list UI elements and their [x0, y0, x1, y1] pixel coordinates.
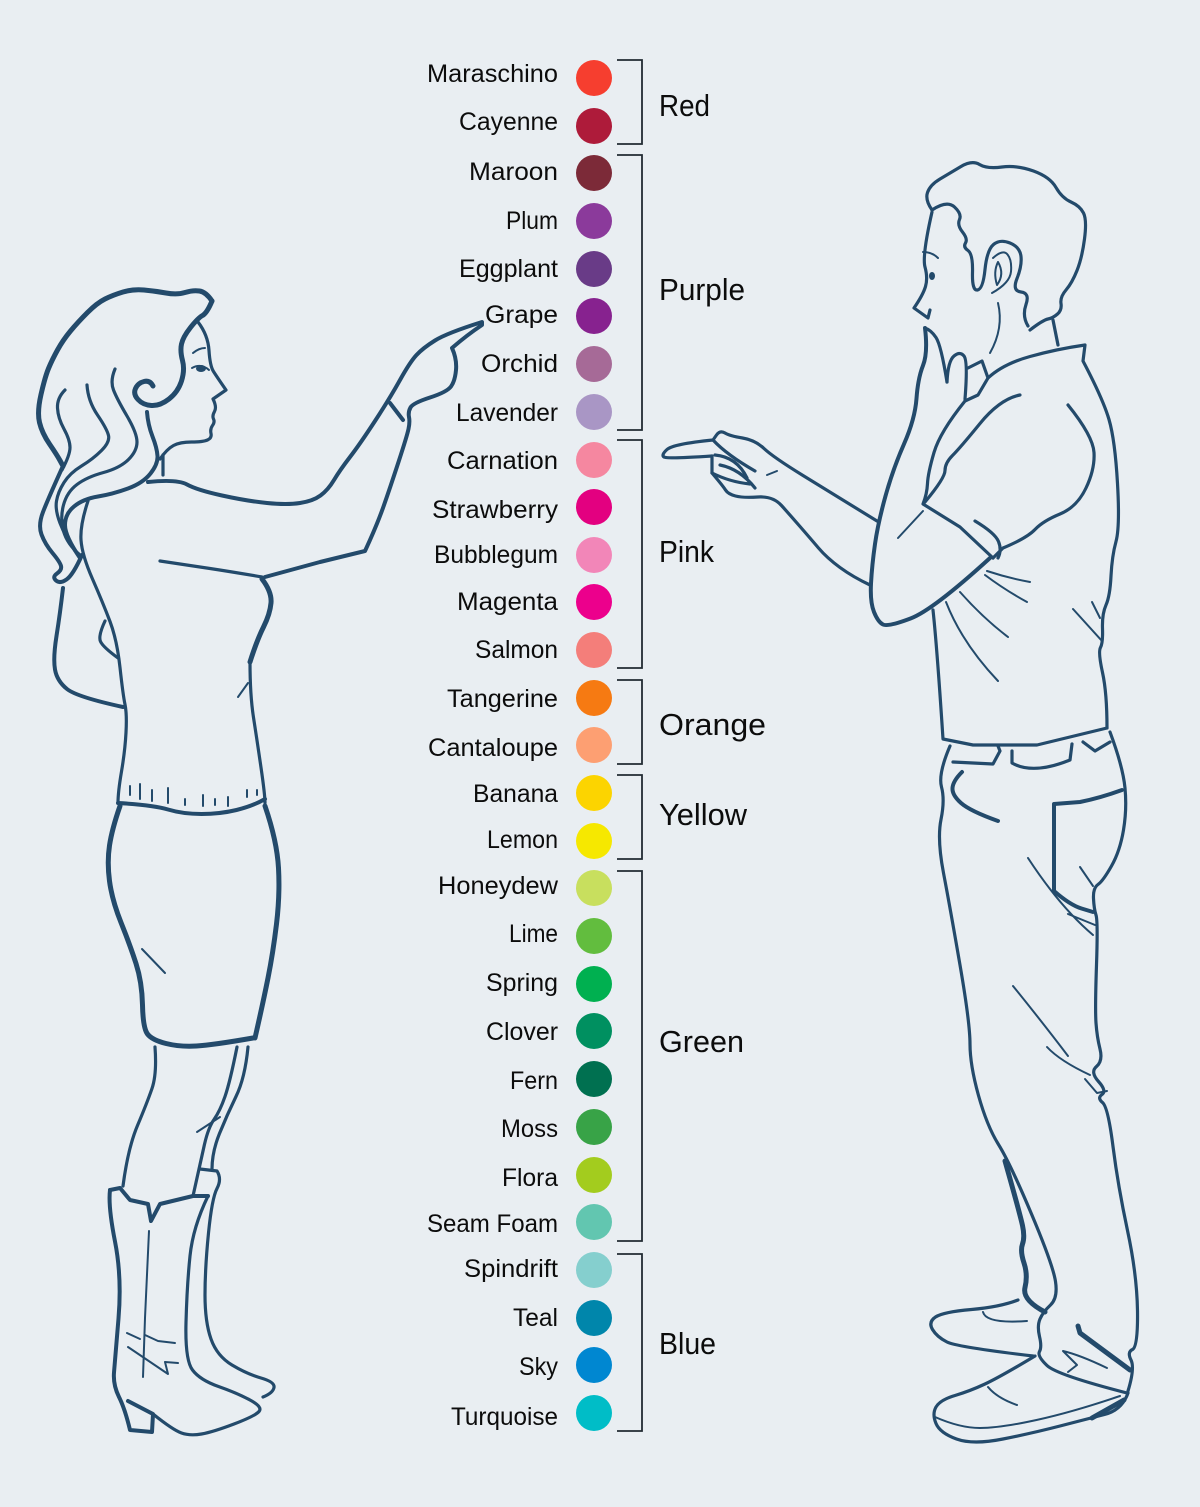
swatch: Salmon — [475, 632, 612, 668]
woman sweater — [54, 501, 271, 814]
swatch: Seam Foam: Seam Foam — [427, 1210, 558, 1238]
swatch: Grape — [485, 298, 612, 334]
group: Green: Green — [659, 1024, 744, 1059]
swatch: Bubblegum — [434, 537, 612, 573]
woman legs — [123, 1047, 248, 1196]
man shirt — [923, 345, 1118, 745]
swatch: Magenta — [457, 584, 612, 620]
man trousers — [939, 732, 1138, 1393]
group: Yellow — [617, 775, 748, 859]
group: Purple — [617, 155, 745, 430]
swatch: Clover: Clover — [486, 1018, 558, 1046]
swatch: Turquoise — [451, 1395, 612, 1431]
swatch: Lemon — [487, 823, 612, 859]
swatch: Lemon: Lemon — [487, 826, 558, 854]
swatch: Lavender — [456, 394, 612, 430]
swatch: Spring: Spring — [486, 969, 558, 997]
swatch: Eggplant — [459, 251, 612, 287]
swatch: Teal: Teal — [513, 1304, 558, 1332]
man shoes — [931, 1300, 1128, 1442]
group: Green — [617, 871, 744, 1241]
swatch: Sky — [519, 1347, 612, 1383]
colour list — [427, 60, 612, 1431]
swatch: Cayenne: Cayenne — [459, 108, 558, 136]
swatch: Banana — [473, 775, 612, 811]
swatch: Carnation: Carnation — [447, 447, 558, 475]
man face — [914, 212, 1058, 353]
swatch: Flora — [502, 1157, 612, 1193]
swatch: Honeydew: Honeydew — [438, 872, 559, 900]
swatch: Cayenne — [459, 108, 612, 144]
swatch: Cantaloupe — [428, 727, 612, 763]
illustration: man pointing — [663, 163, 1138, 1442]
swatch: Seam Foam — [427, 1204, 612, 1240]
swatch: Honeydew — [438, 870, 612, 906]
group: Red: Red — [659, 88, 710, 123]
swatch: Cantaloupe: Cantaloupe — [428, 734, 558, 762]
swatch: Sky: Sky — [519, 1353, 558, 1381]
group: Purple: Purple — [659, 272, 745, 307]
group: Pink — [617, 440, 714, 668]
swatch: Tangerine — [447, 680, 612, 716]
man hair and ear — [927, 163, 1086, 330]
swatch: Fern: Fern — [510, 1067, 558, 1095]
man pointing hand and forearm — [663, 432, 877, 585]
swatch: Spindrift: Spindrift — [464, 1255, 558, 1283]
swatch: Grape: Grape — [485, 301, 558, 329]
swatch: Eggplant: Eggplant — [459, 255, 558, 283]
group: Red — [617, 60, 710, 144]
swatch: Strawberry: Strawberry — [432, 496, 559, 524]
swatch: Clover — [486, 1013, 612, 1049]
swatch: Carnation — [447, 442, 612, 478]
group: Orange: Orange — [659, 707, 766, 742]
swatch: Turquoise: Turquoise — [451, 1403, 558, 1431]
swatch: Lime — [509, 918, 612, 954]
group: Orange — [617, 680, 766, 764]
swatch: Maraschino: Maraschino — [427, 60, 558, 88]
swatch: Plum: Plum — [506, 207, 558, 235]
swatch: Lavender: Lavender — [456, 399, 558, 427]
woman skirt — [108, 806, 279, 1046]
swatch: Orchid: Orchid — [481, 350, 558, 378]
swatch: Moss: Moss — [501, 1115, 558, 1143]
swatch: Maroon: Maroon — [469, 158, 558, 186]
swatch: Strawberry — [432, 489, 612, 525]
woman hair — [39, 290, 212, 582]
woman raised arm — [148, 322, 482, 577]
swatch: Magenta: Magenta — [457, 588, 558, 616]
man hand on chin and bent arm — [871, 328, 990, 625]
swatch: Flora: Flora — [502, 1164, 558, 1192]
swatch: Fern — [510, 1061, 612, 1097]
swatch: Tangerine: Tangerine — [447, 685, 558, 713]
group: Yellow: Yellow — [659, 797, 748, 832]
swatch: Maroon — [469, 155, 612, 191]
swatch: Spindrift — [464, 1252, 612, 1288]
swatch: Teal — [513, 1300, 612, 1336]
woman boots — [110, 1169, 274, 1435]
woman face — [160, 322, 226, 475]
swatch: Moss — [501, 1109, 612, 1145]
swatch: Bubblegum: Bubblegum — [434, 541, 558, 569]
colour groups — [617, 60, 766, 1431]
swatch: Plum — [506, 203, 612, 239]
swatch: Spring — [486, 966, 612, 1002]
swatch: Banana: Banana — [473, 780, 558, 808]
group: Pink: Pink — [659, 534, 714, 569]
swatch: Maraschino — [427, 60, 612, 96]
group: Blue: Blue — [659, 1326, 716, 1361]
illustration: woman pointing — [39, 290, 482, 1435]
swatch: Lime: Lime — [509, 920, 558, 948]
swatch: Orchid — [481, 346, 612, 382]
group: Blue — [617, 1254, 716, 1431]
swatch: Salmon: Salmon — [475, 636, 558, 664]
